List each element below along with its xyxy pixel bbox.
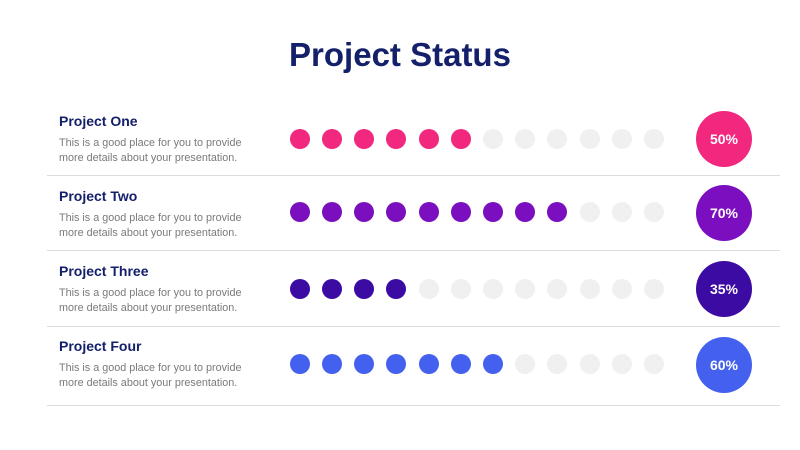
percent badge [696,337,752,393]
text block: This is a good place for you to provide [59,362,241,374]
percent badge [696,111,752,167]
text block: This is a good place for you to provide [59,287,241,299]
heading: Project Two [59,188,137,204]
text block: more details about your presentation. [59,377,237,389]
text block: This is a good place for you to provide [59,212,241,224]
percent badge: 50% [710,131,739,147]
heading: Project Three [59,263,149,279]
percent badge [696,185,752,241]
heading: Project Four [59,338,142,354]
dots [290,129,664,149]
row: project three [59,261,752,317]
row: project four [59,337,752,393]
row: project one [59,111,752,167]
text block: This is a good place for you to provide [59,137,241,149]
dots [290,279,664,299]
text block: more details about your presentation. [59,227,237,239]
percent badge: 35% [710,281,739,297]
dots [290,354,664,374]
percent badge: 70% [710,205,739,221]
text block: more details about your presentation. [59,302,237,314]
row: project two [59,185,752,241]
text block: more details about your presentation. [59,152,237,164]
dots [290,202,664,222]
percent badge: 60% [710,357,739,373]
percent badge [696,261,752,317]
heading: Project One [59,113,138,129]
title: Project Status [289,36,511,73]
